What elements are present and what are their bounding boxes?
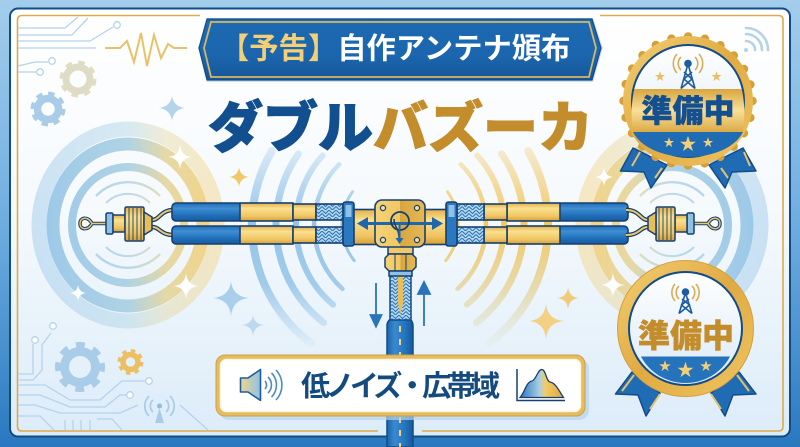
icon: signal pulse	[105, 33, 187, 66]
antenna: feed nut	[385, 246, 416, 276]
vertical feed cable	[387, 270, 413, 447]
medal text: 準備中	[638, 318, 734, 354]
stars: ★	[680, 135, 696, 154]
icon: tower	[673, 54, 703, 88]
antenna: right upper and lower tubes	[423, 202, 628, 246]
signal rings: left	[39, 129, 217, 321]
stars: ★	[654, 71, 666, 83]
antenna: left upper and lower tubes	[172, 202, 377, 246]
stars	[654, 71, 722, 154]
icon: blue gear bottom	[58, 346, 102, 388]
ribbons	[620, 148, 756, 188]
antenna: right connector	[626, 207, 720, 241]
circuit traces: bottom left	[18, 323, 208, 430]
stars: ★	[700, 359, 712, 373]
circuit traces: top left	[18, 17, 120, 75]
ribbons	[616, 372, 756, 416]
antenna: T junction box	[357, 200, 443, 247]
panel: feature label	[216, 355, 589, 420]
signal arcs: centre left	[252, 151, 354, 343]
icon: wifi signal	[744, 28, 768, 52]
badge: bottom medal	[616, 260, 756, 416]
main title: ダブルバズーカ	[208, 97, 593, 159]
stars: ★	[702, 137, 714, 149]
medal text: 準備中	[642, 94, 734, 129]
icon: tower	[672, 284, 699, 314]
signal rings: right	[583, 129, 761, 321]
icon: blue gear top	[34, 94, 62, 124]
signal arcs: centre right	[446, 151, 548, 343]
badge: top medal	[620, 36, 756, 188]
antenna: left connector	[80, 207, 174, 241]
title banner	[198, 18, 603, 82]
icon: gold gear top	[63, 64, 93, 94]
icon: gold gear bottom	[120, 351, 142, 373]
arrow: down	[370, 283, 382, 326]
stars: ★	[664, 137, 674, 149]
icon: speaker	[240, 370, 282, 400]
stars: ★	[677, 361, 694, 380]
stars: ★	[711, 71, 722, 83]
arrow: up	[418, 282, 430, 326]
feature text: 低ノイズ・広帯域	[301, 369, 500, 403]
icon: small antenna	[145, 396, 174, 423]
icon: bandwidth chart	[517, 369, 565, 400]
sparkles	[70, 96, 625, 339]
stars	[659, 359, 712, 380]
banner text: 【予告】自作アンテナ頒布	[220, 32, 570, 66]
stars: ★	[659, 359, 671, 373]
scalloped rim	[623, 36, 753, 166]
